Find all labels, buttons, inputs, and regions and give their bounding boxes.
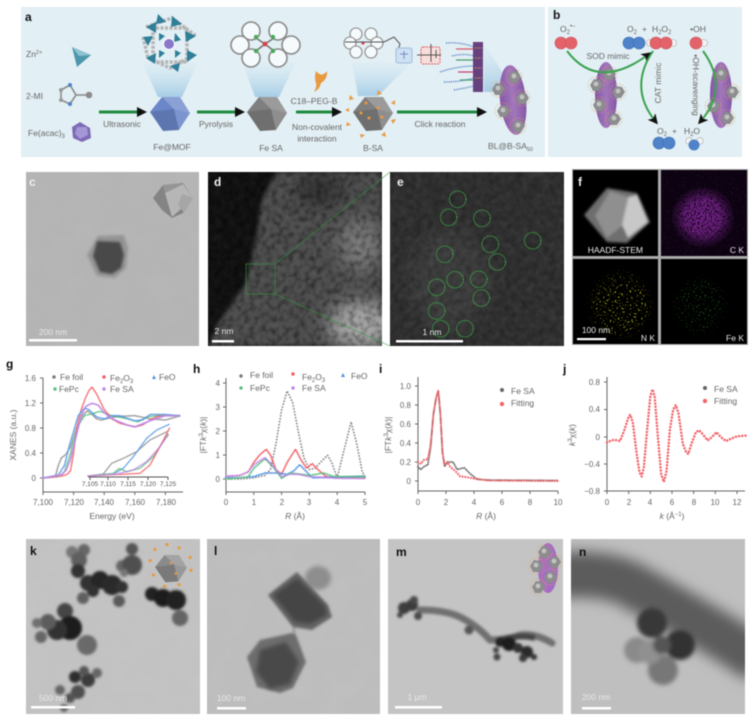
label O2 + H2O2: 2 — [634, 30, 638, 36]
illustration: brush on bacterial membrane — [440, 42, 483, 92]
legend: FePc — [250, 383, 271, 393]
chart j: k-space fit: 12 — [733, 498, 742, 507]
illustration: Fe single-atom lattice — [231, 22, 300, 67]
label O2 + H2O2: O — [661, 24, 668, 34]
legend: 2 — [120, 379, 124, 385]
molecule: hydroxyl — [690, 37, 708, 49]
inset axis and curves: 7,115 — [120, 481, 136, 488]
legend: O — [123, 373, 130, 383]
chart j: k-space fit: 0.4 — [589, 405, 601, 414]
C K map — [661, 170, 747, 256]
legend: Fe — [110, 373, 120, 383]
legend: 3 — [130, 379, 134, 385]
scale bar: 1 nm — [423, 327, 441, 337]
label non-covalent interaction: Non-covalent — [292, 122, 342, 132]
chart j: k-space fit: 4 — [648, 498, 653, 507]
legend: Fe SA — [511, 386, 535, 396]
label non-covalent interaction: interaction — [297, 134, 337, 144]
inset axis and curves: 7,125 — [160, 481, 177, 488]
panel label b: b — [553, 8, 560, 22]
legend: Fe SA — [302, 383, 326, 393]
molecule: water — [686, 138, 703, 150]
cone to BL — [484, 43, 506, 92]
label O2 + H2O2: H — [652, 24, 658, 34]
label SOD mimic: SOD mimic — [587, 51, 630, 61]
legend: FeO — [159, 372, 176, 382]
y title: 3 — [568, 438, 574, 442]
panel label e: e — [397, 175, 404, 189]
icon: 2-methylimidazole — [59, 83, 92, 106]
label O2 + H2O: O — [693, 126, 700, 136]
inset axis and curves: 7,120 — [140, 481, 157, 488]
legend: 3 — [322, 378, 326, 384]
panel m: TEM — [388, 539, 563, 714]
chart h: FT-EXAFS: 4 — [216, 379, 221, 388]
chart j: k-space fit: 2 — [627, 498, 632, 507]
panel label j: j — [562, 362, 566, 376]
molecule: O2 — [623, 37, 645, 49]
N K map: N K — [641, 333, 655, 343]
y title: |FTk — [198, 437, 208, 453]
arrow: click reaction — [397, 107, 487, 117]
chart j: k-space fit: 10 — [711, 498, 720, 507]
molecule: product O2 — [653, 137, 675, 149]
legend: FeO — [351, 371, 368, 381]
icon: C18-PEG-B — [314, 70, 327, 92]
legend: Fe — [302, 372, 312, 382]
Fe K map: Fe K — [726, 333, 744, 343]
chart i: R-space fit: 1.0 — [400, 382, 412, 391]
panel label n: n — [579, 545, 586, 559]
curves — [418, 391, 558, 481]
chart i: R-space fit: 10 — [554, 498, 563, 507]
bacterial body — [550, 574, 754, 662]
chart i: R-space fit — [383, 377, 563, 521]
label O2 + H2O: 2 — [690, 132, 694, 138]
chart g: XANES: 1.6 — [25, 374, 37, 383]
label BL@B-SA50: BL@B-SA — [488, 141, 527, 151]
label Fe(acac)3: Fe(acac) — [28, 128, 62, 138]
chart g: XANES: 7,160 — [125, 498, 146, 507]
inset axis and curves — [82, 424, 177, 488]
arrow: ultrasonic — [99, 107, 147, 117]
chart h: FT-EXAFS: 4 — [335, 498, 340, 507]
panel label l: l — [214, 544, 217, 558]
label Fe SA: Fe SA — [259, 143, 283, 153]
rod with particles — [397, 596, 552, 662]
y title: 3 — [384, 433, 390, 437]
panel a: synthesis scheme — [21, 7, 545, 157]
scale bar: 2 nm — [215, 326, 233, 336]
axis title: R (Å) — [476, 511, 496, 521]
panel label d: d — [214, 175, 221, 189]
panel label a: a — [25, 10, 32, 24]
chart g: XANES: 1.2 — [25, 399, 37, 408]
chart i: R-space fit: 8 — [528, 498, 533, 507]
panel c: TEM image — [26, 172, 199, 346]
chart h: FT-EXAFS: 5 — [363, 498, 368, 507]
illustration: MOF framework — [143, 14, 197, 72]
y title: χ( — [198, 426, 208, 433]
scale bar: 100 nm — [217, 693, 245, 703]
polyhedron: Fe@MOF — [150, 97, 190, 131]
label 2-MI: 2-MI — [26, 91, 43, 101]
chart j: k-space fit: −0.4 — [584, 460, 601, 469]
arrow: pyrolysis — [197, 107, 245, 117]
label hydroxyl: •OH — [690, 24, 706, 34]
particle cluster — [624, 608, 695, 685]
chart i: R-space fit: 0.4 — [400, 439, 412, 448]
scale bar — [396, 327, 463, 342]
axis title: ) — [682, 511, 685, 521]
chart j: k-space fit: 0.8 — [589, 378, 601, 387]
scale bar: 200 nm — [39, 327, 67, 337]
legend: 2 — [312, 378, 316, 384]
label O2 + H2O2: 2 — [668, 30, 672, 36]
chart i: R-space fit: 4 — [472, 498, 477, 507]
inset bacterium — [528, 543, 562, 595]
scale bar — [217, 693, 246, 710]
HAADF-STEM map — [573, 170, 658, 256]
y title: χ( — [383, 426, 393, 433]
label OH scavenging: •OH-scavenging — [691, 54, 701, 116]
chart h: FT-EXAFS: 1 — [216, 451, 221, 460]
chart g: XANES: 7,120 — [64, 498, 85, 507]
arrow: SOD mimic — [567, 51, 649, 72]
arrow: OH scavenging — [700, 51, 716, 122]
label CAT mimic: CAT mimic — [653, 62, 663, 103]
y title: 3 — [199, 433, 205, 437]
scale bar: 100 nm — [582, 325, 610, 335]
panel b: enzyme mimic mechanism — [548, 7, 742, 157]
panel n: TEM — [570, 538, 746, 714]
polyhedron: B-SA with ligands — [345, 90, 396, 138]
illustration: B-SA molecule — [344, 28, 441, 64]
chart i: R-space fit: 0 — [416, 498, 421, 507]
panel k: TEM — [26, 539, 200, 714]
chart j: k-space fit — [567, 377, 746, 521]
label C18-PEG-B: C18–PEG-B — [291, 96, 338, 106]
axis title: k (Å — [660, 511, 675, 521]
legend: Fe foil — [60, 372, 83, 382]
scale bar — [395, 692, 442, 708]
y title: k)| — [198, 417, 208, 426]
scale bar: 200 nm — [582, 692, 610, 702]
N K map — [573, 259, 658, 344]
panel label f: f — [578, 175, 583, 189]
label O2 + H2O2: 2 — [658, 30, 662, 36]
chart g: XANES: 0.8 — [25, 424, 37, 433]
particle — [87, 235, 128, 278]
label superoxide: •− — [570, 24, 576, 30]
curve — [607, 389, 746, 482]
chart h: FT-EXAFS: 0 — [224, 498, 229, 507]
label Fe(acac)3: 3 — [62, 134, 66, 140]
single-atom circles — [428, 191, 541, 337]
chart h: FT-EXAFS: 0 — [216, 475, 221, 484]
legend: FePc — [59, 384, 80, 394]
label B-SA: B-SA — [363, 143, 383, 153]
illustration: BL@B-SA50 rod — [490, 64, 530, 136]
chart g: XANES: 0.4 — [25, 449, 37, 458]
Fe K map — [661, 259, 747, 344]
panel label k: k — [30, 544, 37, 558]
HAADF-STEM map: HAADF-STEM — [588, 245, 643, 255]
scale bar — [582, 692, 611, 710]
y title: k) — [567, 424, 577, 431]
y title: χ( — [567, 431, 577, 438]
chart h: FT-EXAFS: 3 — [307, 498, 312, 507]
legend: Fitting — [714, 396, 737, 406]
chart j: k-space fit: 6 — [670, 498, 675, 507]
legend — [239, 370, 368, 393]
y title: k — [567, 441, 577, 446]
label Fe@MOF: Fe@MOF — [153, 142, 191, 152]
chart i: R-space fit: 0.8 — [400, 401, 412, 410]
inset B-SA — [149, 543, 193, 588]
cone to Fe SA — [242, 62, 296, 97]
particle clusters — [32, 543, 188, 712]
chart i: R-space fit: 0.6 — [400, 420, 412, 429]
chart h: FT-EXAFS — [198, 370, 368, 521]
panel d: HAADF image — [208, 172, 396, 349]
label Zn2+: Zn — [26, 49, 36, 59]
C K map: C K — [730, 245, 744, 255]
rod right — [705, 62, 740, 128]
y title: k)| — [383, 417, 393, 426]
axis title: R (Å) — [285, 511, 305, 521]
polyhedron: Fe SA — [247, 97, 287, 131]
arrow: non-covalent — [296, 107, 342, 117]
chart i: R-space fit: 0.2 — [400, 458, 412, 467]
scale bar: 1 µm — [407, 692, 427, 702]
panel label i: i — [379, 362, 382, 376]
chart h: FT-EXAFS: 2 — [280, 498, 285, 507]
label O2 + H2O2: O — [627, 24, 634, 34]
legend: Fe SA — [714, 384, 738, 394]
chart i: R-space fit: 0 — [407, 477, 412, 486]
label O2 + H2O2: + — [642, 24, 647, 34]
chart j: k-space fit: 0 — [596, 433, 601, 442]
molecule: superoxide — [555, 37, 577, 49]
label superoxide: O — [560, 24, 567, 34]
scale bar — [29, 327, 77, 342]
panel label h: h — [193, 362, 200, 376]
icon: zinc tetrahedron — [72, 47, 91, 67]
inset polyhedron — [153, 183, 193, 218]
icon: Fe(acac)3 polyhedron — [72, 122, 91, 142]
label Pyrolysis: Pyrolysis — [199, 119, 233, 129]
scale bar — [31, 693, 75, 708]
chart j: k-space fit: −0.8 — [584, 487, 601, 496]
label Ultrasonic: Ultrasonic — [103, 119, 142, 129]
chart j: k-space fit: 8 — [692, 498, 697, 507]
curves — [226, 391, 365, 479]
arrow: CAT mimic — [641, 51, 656, 122]
chart h: FT-EXAFS: 3 — [216, 403, 221, 412]
label Zn2+: 2+ — [36, 50, 42, 56]
chart j: k-space fit: 0 — [605, 498, 610, 507]
label superoxide: 2 — [567, 30, 571, 36]
chart g: XANES: 0 — [32, 474, 37, 483]
panel e: atomic resolution image — [390, 172, 564, 346]
chart i: R-space fit: 2 — [444, 498, 449, 507]
chart g: XANES: 7,180 — [156, 498, 177, 507]
chart h: FT-EXAFS: 2 — [216, 427, 221, 436]
legend — [500, 386, 535, 408]
legend: Fe SA — [110, 384, 134, 394]
rod left — [588, 62, 626, 128]
scale bar: 500 nm — [39, 693, 67, 703]
y title: XANES (a.u.) — [8, 409, 18, 461]
axis title: −1 — [675, 512, 682, 518]
chart i: R-space fit: 6 — [500, 498, 505, 507]
inset axis and curves: 7,110 — [100, 481, 116, 488]
legend — [52, 372, 176, 394]
legend: O — [315, 372, 322, 382]
particles — [305, 566, 331, 590]
panel label c: c — [29, 175, 36, 189]
label O2 + H2O: + — [672, 126, 677, 136]
inset axis and curves: 7,105 — [82, 481, 99, 488]
scale bar — [212, 326, 234, 342]
y title: |FTk — [383, 437, 393, 453]
molecule: H2O2 — [646, 37, 676, 49]
chart g: XANES — [8, 372, 183, 521]
legend: Fitting — [511, 398, 534, 408]
axis title: Energy (eV) — [89, 511, 135, 521]
cone to MOF — [142, 62, 198, 97]
curves — [43, 387, 181, 478]
label O2 + H2O: H — [684, 126, 690, 136]
panel f: elemental mapping — [572, 169, 748, 345]
chart g: XANES: 7,140 — [94, 498, 115, 507]
panel label m: m — [396, 545, 407, 559]
legend — [703, 384, 738, 406]
chart h: FT-EXAFS: 1 — [252, 498, 257, 507]
label O2 + H2O: O — [657, 126, 664, 136]
label BL@B-SA50: 50 — [527, 147, 533, 153]
label O2 + H2O: 2 — [664, 132, 668, 138]
panel l: TEM — [207, 539, 380, 714]
zoom square and connectors — [246, 172, 390, 346]
legend: Fe foil — [250, 370, 273, 380]
label Click reaction: Click reaction — [414, 119, 466, 129]
chart g: XANES: 7,100 — [33, 498, 54, 507]
cone to B-SA — [352, 62, 412, 96]
panel label g: g — [6, 357, 13, 371]
